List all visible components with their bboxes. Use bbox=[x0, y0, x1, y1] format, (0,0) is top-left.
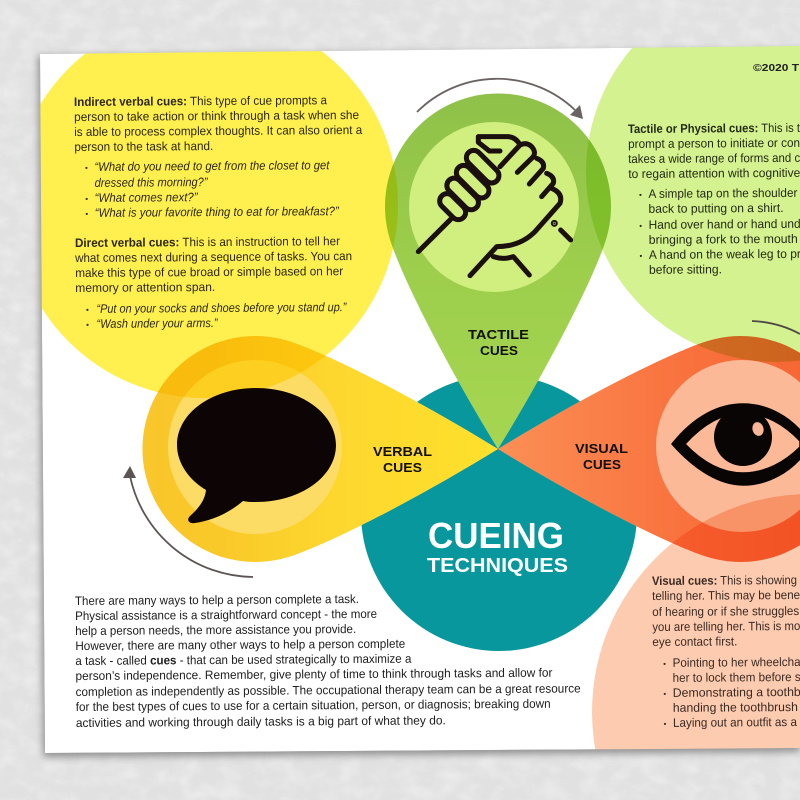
panel: light green tactile circle bbox=[586, 46, 800, 362]
text block: verbal cues: Indirect verbal cues: This type of cue prompts a bbox=[74, 93, 327, 109]
text block: tactile cues bbox=[628, 121, 800, 277]
title: TECHNIQUES bbox=[427, 555, 568, 577]
icon: speech bubble bbox=[177, 388, 336, 523]
text block: visual cues: Demonstrating a toothb bbox=[673, 685, 800, 700]
text block: introduction: for the best types of cues to use for a certain situation, person, or diagnosis; breaking down bbox=[76, 697, 551, 714]
label: tactile cues bbox=[468, 327, 529, 358]
text block: introduction bbox=[75, 590, 581, 730]
text block: verbal cues: “What do you need to get from the closet to get bbox=[94, 158, 330, 174]
text block: tactile cues: A simple tap on the shoulder bbox=[648, 186, 797, 201]
visual pin bbox=[498, 336, 800, 562]
text block: verbal cues: is able to process complex thoughts. It can also orient a bbox=[74, 123, 362, 139]
text block: verbal cues: what comes next during a sequence of tasks. You can bbox=[74, 249, 352, 265]
tactile pin bbox=[385, 93, 611, 449]
text block: verbal cues: person to the task at hand. bbox=[74, 139, 213, 154]
icon: eye bbox=[672, 404, 800, 485]
icon: clasped hands bbox=[418, 137, 571, 276]
text block: introduction: However, there are many other ways to help a person complete bbox=[75, 637, 405, 653]
label: visual cues: VISUAL bbox=[575, 441, 628, 456]
text block: introduction: activities and working through daily tasks is a big part of what they do. bbox=[76, 713, 446, 730]
text block: verbal cues: dressed this morning?” bbox=[94, 175, 208, 190]
text block: tactile cues: bringing a fork to the mouth bbox=[649, 232, 798, 247]
text block: tactile cues: Tactile or Physical cues: This is t bbox=[628, 121, 800, 136]
panel: teal title circle bbox=[361, 375, 637, 651]
text block: visual cues: eye contact first. bbox=[652, 634, 737, 649]
arrow: verbal to tactile bbox=[417, 79, 583, 119]
panel: peach visual circle bbox=[592, 494, 800, 760]
label: tactile cues: TACTILE bbox=[468, 327, 529, 342]
text block: introduction: a task - called cues - that can be used strategically to maximize a bbox=[75, 652, 412, 668]
pin knockouts over teal bbox=[142, 93, 800, 562]
text block: verbal cues: “What is your favorite thing to eat for breakfast?” bbox=[95, 204, 340, 220]
text block: tactile cues: before sitting. bbox=[649, 262, 722, 277]
copyright: ©2020 T bbox=[753, 62, 800, 74]
title: CUEING bbox=[428, 515, 564, 556]
text block: visual cues bbox=[652, 573, 800, 730]
text block: introduction: help a person needs, the more assistance you provide. bbox=[75, 622, 356, 638]
label: visual cues bbox=[575, 441, 628, 472]
text block: introduction: completion as independently as possible. The occupational therapy team can be a great resource bbox=[76, 681, 581, 699]
text block: verbal cues: memory or attention span. bbox=[75, 280, 215, 295]
text block: verbal cues: person to take action or think through a task when she bbox=[74, 108, 359, 124]
text block: verbal cues: make this type of cue broad or simple based on her bbox=[75, 264, 343, 280]
text block: introduction: Physical assistance is a straightforward concept - the more bbox=[75, 607, 377, 623]
text block: introduction: person’s independence. Remember, give plenty of time to think through tasks and allow for bbox=[75, 666, 553, 683]
label: verbal cues: CUES bbox=[383, 460, 422, 475]
text block: visual cues: handing the toothbrush bbox=[673, 700, 798, 715]
text block: tactile cues: to regain attention with cognitive bbox=[628, 166, 800, 181]
text block: introduction: There are many ways to help a person complete a task. bbox=[75, 592, 359, 608]
text block: tactile cues: back to putting on a shirt. bbox=[648, 201, 784, 216]
label: verbal cues bbox=[373, 444, 432, 475]
text block: verbal cues: Direct verbal cues: This is an instruction to tell her bbox=[75, 234, 340, 250]
panel: yellow verbal circle bbox=[40, 51, 398, 398]
text block: verbal cues: “Put on your socks and shoes before you stand up.” bbox=[96, 300, 347, 316]
label: tactile cues: CUES bbox=[480, 343, 518, 358]
text block: visual cues: Laying out an outfit as a bbox=[673, 715, 797, 730]
text block: verbal cues: “Wash under your arms.” bbox=[96, 316, 218, 331]
text block: verbal cues bbox=[73, 93, 364, 331]
arrow: tactile to visual bbox=[752, 321, 800, 334]
arrow: to verbal bbox=[123, 466, 253, 577]
label: verbal cues: VERBAL bbox=[373, 444, 432, 459]
label: visual cues: CUES bbox=[583, 457, 621, 472]
verbal pin bbox=[142, 336, 498, 562]
title bbox=[427, 515, 568, 577]
text block: verbal cues: “What comes next?” bbox=[95, 190, 199, 205]
